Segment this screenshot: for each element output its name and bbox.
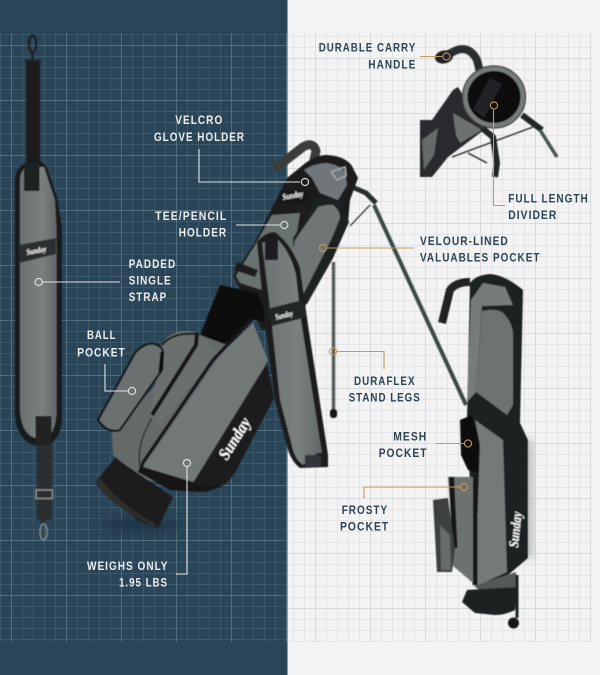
main panel zipper seam bbox=[142, 319, 252, 464]
crop handle tip bbox=[434, 49, 454, 65]
side shadow bbox=[524, 440, 532, 558]
label: weighs only 1.95 lbs: 1.95 LBS bbox=[119, 576, 168, 590]
label: ball pocket: POCKET bbox=[77, 345, 126, 359]
carry handle bbox=[277, 145, 316, 167]
label: frosty pocket bbox=[340, 483, 468, 534]
mesh pocket bbox=[200, 285, 268, 350]
frosty pocket bbox=[448, 477, 473, 583]
valuables pocket bbox=[293, 198, 349, 304]
padded front strap bbox=[257, 232, 328, 468]
side leg and ball foot bbox=[508, 575, 519, 628]
upper body bbox=[233, 155, 358, 330]
opening interior bbox=[468, 71, 520, 123]
label: mesh pocket: POCKET bbox=[379, 446, 428, 460]
label: padded single strap: PADDED bbox=[129, 257, 176, 271]
ball pocket bbox=[98, 344, 163, 431]
crop body bbox=[420, 87, 484, 177]
top gray band bbox=[304, 163, 347, 200]
front strap logo band bbox=[267, 300, 307, 326]
side mesh pocket bbox=[460, 415, 479, 473]
strap bottom clip bbox=[40, 518, 47, 540]
side seam bbox=[472, 475, 478, 585]
navy panel grid bbox=[0, 33, 287, 642]
small outer pocket bbox=[433, 498, 455, 572]
opening rim bbox=[462, 66, 526, 128]
foot base ring bbox=[95, 478, 158, 528]
crop stand and legs bbox=[452, 115, 557, 177]
side lower gray panel bbox=[475, 420, 507, 587]
strap wedge buckle bbox=[234, 262, 258, 277]
product: detached padded shoulder strap bbox=[15, 36, 62, 540]
valuables pocket gray face bbox=[292, 205, 340, 295]
side upper gray panel bbox=[467, 283, 513, 402]
label: padded single strap: STRAP bbox=[129, 290, 167, 304]
stand hinge bbox=[350, 186, 376, 203]
light panel grid bbox=[288, 33, 592, 642]
label: full length divider: DIVIDER bbox=[508, 208, 557, 222]
strap logo band bbox=[19, 238, 56, 263]
label: velcro glove holder: GLOVE HOLDER bbox=[154, 130, 245, 144]
side gray sliver bbox=[474, 572, 516, 592]
D-ring bbox=[331, 167, 346, 180]
top logo band: Sunday bbox=[282, 188, 305, 202]
interior divider bbox=[473, 78, 502, 118]
strap top clip bbox=[25, 36, 41, 61]
side upper body bbox=[467, 274, 528, 587]
second pocket top edge bbox=[162, 334, 197, 345]
stand leg foot bbox=[330, 409, 337, 418]
label: mesh pocket bbox=[379, 429, 472, 460]
crop gray fold bbox=[453, 113, 482, 143]
label: padded single strap: SINGLE bbox=[129, 274, 172, 288]
frosty pocket zipper bbox=[452, 477, 455, 548]
label: durable carry handle bbox=[319, 41, 450, 71]
label: tee/pencil holder bbox=[155, 209, 288, 240]
label: frosty pocket: FROSTY bbox=[342, 503, 388, 517]
top logo band bbox=[277, 188, 313, 204]
front strap tab bbox=[265, 237, 278, 260]
label: tee/pencil holder: HOLDER bbox=[179, 226, 227, 240]
label: mesh pocket: MESH bbox=[393, 429, 427, 443]
label: duraflex stand legs: STAND LEGS bbox=[349, 391, 421, 405]
product: top-down view of bag opening bbox=[420, 49, 557, 177]
stand legs bbox=[334, 205, 466, 410]
strap lower tab bbox=[36, 416, 52, 446]
small pocket gray bbox=[440, 525, 451, 570]
label: velour-lined valuables pocket: VALUABLES POCKET bbox=[420, 251, 540, 265]
label: velcro glove holder: VELCRO bbox=[175, 113, 223, 127]
label: padded single strap bbox=[35, 257, 176, 304]
body rear gray bbox=[112, 335, 268, 490]
background: light right panel bbox=[288, 0, 600, 675]
label: durable carry handle: DURABLE CARRY bbox=[319, 41, 416, 55]
strap logo band: Sunday bbox=[26, 244, 47, 257]
strap pad gray face bbox=[20, 167, 56, 438]
label: duraflex stand legs: DURAFLEX bbox=[354, 374, 416, 388]
label: ball pocket bbox=[77, 328, 136, 395]
label: duraflex stand legs bbox=[329, 348, 421, 405]
label: velour-lined valuables pocket: VELOUR-LINED bbox=[420, 234, 509, 248]
label: weighs only 1.95 lbs: WEIGHS ONLY bbox=[87, 559, 168, 573]
strap pad bbox=[15, 160, 62, 445]
side handle bbox=[442, 282, 470, 323]
padded front strap gray face bbox=[262, 237, 322, 465]
foot cylinder bbox=[95, 458, 173, 528]
product: side view of bag bbox=[433, 274, 532, 628]
strap upper tab bbox=[24, 163, 40, 191]
black logo panel bbox=[193, 363, 274, 487]
label: velour-lined valuables pocket bbox=[319, 234, 540, 265]
front strap bottom tab bbox=[305, 455, 321, 467]
label: velcro glove holder bbox=[154, 113, 309, 186]
side logo: Sunday bbox=[507, 510, 526, 548]
strap lower webbing bbox=[37, 445, 52, 520]
ball pocket zipper pull bbox=[160, 352, 162, 372]
label: durable carry handle: HANDLE bbox=[368, 57, 416, 71]
crop light panel bbox=[422, 128, 438, 170]
strap buckle bbox=[36, 490, 52, 498]
main lower gray panel bbox=[143, 323, 268, 482]
side foot bbox=[462, 587, 517, 615]
side upper pocket gray face bbox=[476, 310, 513, 415]
strap upper webbing bbox=[26, 62, 40, 172]
ground shadow bbox=[100, 518, 180, 532]
crop carry handle bbox=[442, 49, 480, 72]
upper left gray panel bbox=[236, 213, 300, 290]
second pocket bbox=[150, 331, 217, 425]
second pocket zipper bbox=[152, 333, 197, 415]
label: full length divider bbox=[490, 102, 589, 222]
product: main bag, three-quarter view bbox=[95, 145, 466, 532]
label: weighs only 1.95 lbs bbox=[87, 459, 191, 590]
label: frosty pocket: POCKET bbox=[340, 520, 389, 534]
body lower black hem bbox=[138, 464, 224, 492]
body inner pocket seam bbox=[139, 418, 152, 466]
label: tee/pencil holder: TEE/PENCIL bbox=[155, 209, 227, 223]
front strap logo band: Sunday bbox=[274, 308, 294, 322]
label: ball pocket: BALL bbox=[87, 328, 116, 342]
lower body logo: Sunday bbox=[214, 414, 255, 463]
background: navy left panel bbox=[0, 0, 288, 675]
